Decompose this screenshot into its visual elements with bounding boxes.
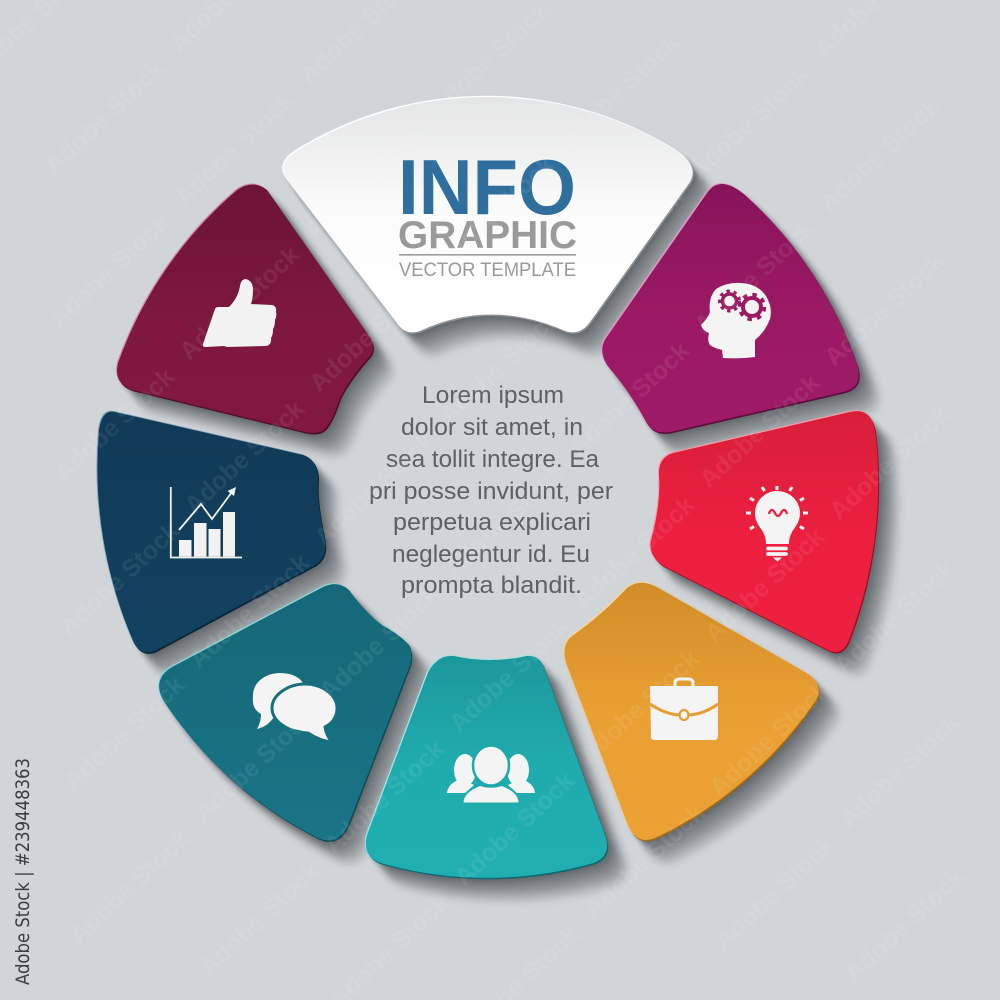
watermark: Adobe Stock pattern: Adobe Stock [424, 0, 555, 121]
watermark: Adobe Stock pattern: Adobe Stock [689, 215, 820, 339]
watermark: Adobe Stock pattern: Adobe Stock [694, 369, 825, 493]
icon: bar chart with rising arrow [171, 487, 242, 558]
center text block: prompta blandit. [401, 572, 582, 599]
center text block: perpetua explicari [393, 509, 591, 536]
watermark: Adobe Stock pattern: Adobe Stock [64, 825, 195, 949]
watermark: Adobe Stock pattern: Adobe Stock [39, 55, 170, 179]
icon: speech bubbles [253, 673, 337, 742]
stock image id, vertical: Adobe Stock | #239448363 [12, 758, 34, 985]
center text block: dolor sit amet, in [401, 414, 583, 441]
icon: head with gears [701, 283, 771, 358]
watermark: Adobe Stock pattern: Adobe Stock [444, 613, 575, 737]
panel: orange segment with briefcase [563, 582, 820, 842]
watermark: Adobe Stock pattern: Adobe Stock [59, 671, 190, 795]
watermark: Adobe Stock pattern: Adobe Stock [184, 549, 315, 673]
watermark: Adobe Stock pattern: Adobe Stock [194, 857, 325, 981]
watermark: Adobe Stock pattern: Adobe Stock [579, 799, 710, 923]
watermark: Adobe Stock pattern: Adobe Stock [54, 517, 185, 641]
panel: maroon segment with thumbs up [116, 184, 374, 434]
watermark: Adobe Stock pattern: Adobe Stock [309, 427, 440, 551]
watermark: Adobe Stock pattern: Adobe Stock [574, 645, 705, 769]
watermark: Adobe Stock pattern: Adobe Stock [189, 703, 320, 827]
watermark: Adobe Stock pattern: Adobe Stock [704, 677, 835, 801]
watermark: Adobe Stock pattern: Adobe Stock [314, 581, 445, 705]
cast shadows under the panels [99, 99, 899, 902]
watermark: Adobe Stock pattern: Adobe Stock [179, 395, 310, 519]
center text block [369, 382, 613, 599]
center text block: neglegentur id. Eu [392, 541, 590, 568]
watermark: Adobe Stock pattern: Adobe Stock [559, 183, 690, 307]
center text block: pri posse invidunt, per [369, 478, 613, 505]
center text block: Lorem ipsum [422, 382, 564, 409]
watermark: Adobe Stock pattern: Adobe Stock [304, 273, 435, 397]
center text block: sea tollit integre. Ea [386, 446, 600, 473]
panel: teal segment with people group [365, 655, 608, 879]
panel: navy segment with growth chart [96, 411, 326, 654]
watermark: Adobe Stock pattern: Adobe Stock [814, 93, 945, 217]
heading: INFO: INFO [398, 143, 576, 231]
watermark: Adobe Stock pattern: Adobe Stock [44, 209, 175, 333]
watermark: Adobe Stock pattern: Adobe Stock [569, 491, 700, 615]
watermark: Adobe Stock pattern: Adobe Stock [449, 767, 580, 891]
watermark: Adobe Stock pattern: Adobe Stock [819, 247, 950, 371]
icon: group of people [447, 746, 535, 803]
divider under heading [399, 254, 576, 256]
watermark: Adobe Stock pattern: Adobe Stock [319, 735, 450, 859]
watermark: Adobe Stock pattern: Adobe Stock [169, 87, 300, 211]
panel: purple segment with head and gears [601, 183, 860, 434]
panel: white title segment [282, 96, 694, 334]
watermark: Adobe Stock pattern: Adobe Stock [564, 337, 695, 461]
panel: blue-green segment with speech bubbles [158, 583, 412, 842]
heading: GRAPHIC: GRAPHIC [398, 214, 577, 257]
watermark: Adobe Stock pattern: Adobe Stock [834, 709, 965, 833]
icon: briefcase [650, 679, 718, 740]
icon: lightbulb [746, 486, 808, 562]
watermark: Adobe Stock pattern: Adobe Stock [299, 119, 430, 243]
watermark: Adobe Stock pattern: Adobe Stock [824, 401, 955, 525]
watermark: Adobe Stock pattern: Adobe Stock [174, 241, 305, 365]
watermark: Adobe Stock pattern: Adobe Stock [699, 523, 830, 647]
watermark: Adobe Stock pattern: Adobe Stock [434, 305, 565, 429]
watermark: Adobe Stock pattern: Adobe Stock [429, 151, 560, 275]
watermark: Adobe Stock pattern: Adobe Stock [554, 29, 685, 153]
watermark: Adobe Stock pattern: Adobe Stock [839, 863, 970, 987]
watermark: Adobe Stock pattern: Adobe Stock [829, 555, 960, 679]
watermark: Adobe Stock pattern: Adobe Stock [439, 459, 570, 583]
subheading: VECTOR TEMPLATE: VECTOR TEMPLATE [399, 259, 576, 281]
panel: red segment with lightbulb [649, 410, 879, 654]
watermark: Adobe Stock pattern: Adobe Stock [684, 61, 815, 185]
icon: thumbs up [203, 279, 276, 347]
watermark: Adobe Stock pattern: Adobe Stock [49, 363, 180, 487]
watermark: Adobe Stock pattern: Adobe Stock [709, 831, 840, 955]
